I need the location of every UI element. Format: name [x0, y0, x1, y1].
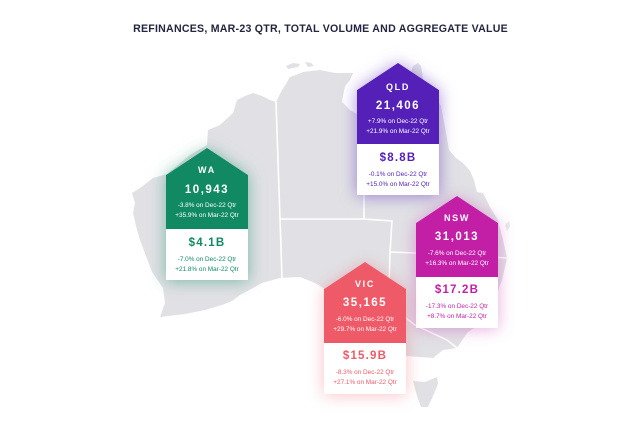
WA volume change Mar-22: +35.9% on Mar-22 Qtr	[175, 212, 239, 219]
WA card shape	[155, 141, 259, 292]
WA value change Dec-22: -7.0% on Dec-22 Qtr	[178, 256, 236, 263]
VIC card shape	[315, 258, 415, 404]
panel: VIC	[315, 258, 415, 404]
title: REFINANCES, MAR-23 QTR, TOTAL VOLUME AND AGGREGATE VALUE	[133, 23, 508, 35]
QLD volume: 21,406	[376, 100, 420, 112]
WA volume: 10,943	[185, 184, 229, 196]
VIC volume change Mar-22: +29.7% on Mar-22 Qtr	[333, 326, 397, 333]
QLD card shape	[346, 56, 450, 207]
NSW label: NSW	[444, 213, 470, 223]
NSW value: $17.2B	[435, 284, 479, 296]
VIC volume: 35,165	[343, 297, 387, 309]
WA volume change Dec-22: -3.8% on Dec-22 Qtr	[178, 202, 236, 209]
NSW volume change Mar-22: +16.3% on Mar-22 Qtr	[425, 260, 489, 267]
NSW card shape	[406, 191, 508, 339]
WA value: $4.1B	[189, 237, 225, 249]
panel: NSW	[406, 191, 508, 339]
NSW value change Dec-22: -17.3% on Dec-22 Qtr	[426, 303, 488, 310]
NSW value change Mar-22: +8.7% on Mar-22 Qtr	[427, 313, 487, 320]
VIC label: VIC	[355, 279, 375, 289]
WA label: WA	[198, 165, 216, 175]
VIC value: $15.9B	[343, 350, 387, 362]
QLD volume change Dec-22: +7.9% on Dec-22 Qtr	[368, 118, 428, 125]
VIC value change Mar-22: +27.1% on Mar-22 Qtr	[333, 379, 397, 386]
NSW volume change Dec-22: -7.6% on Dec-22 Qtr	[428, 250, 486, 257]
QLD volume change Mar-22: +21.9% on Mar-22 Qtr	[366, 128, 430, 135]
WA value change Mar-22: +21.8% on Mar-22 Qtr	[175, 266, 239, 273]
VIC volume change Dec-22: -6.0% on Dec-22 Qtr	[336, 316, 394, 323]
QLD value change Dec-22: -0.1% on Dec-22 Qtr	[369, 171, 427, 178]
panel: QLD	[346, 56, 450, 207]
QLD label: QLD	[386, 82, 410, 92]
panel: WA	[155, 141, 259, 292]
NSW volume: 31,013	[435, 231, 479, 243]
VIC value change Dec-22: -8.3% on Dec-22 Qtr	[336, 369, 394, 376]
QLD value: $8.8B	[380, 152, 416, 164]
QLD value change Mar-22: +15.0% on Mar-22 Qtr	[366, 181, 430, 188]
